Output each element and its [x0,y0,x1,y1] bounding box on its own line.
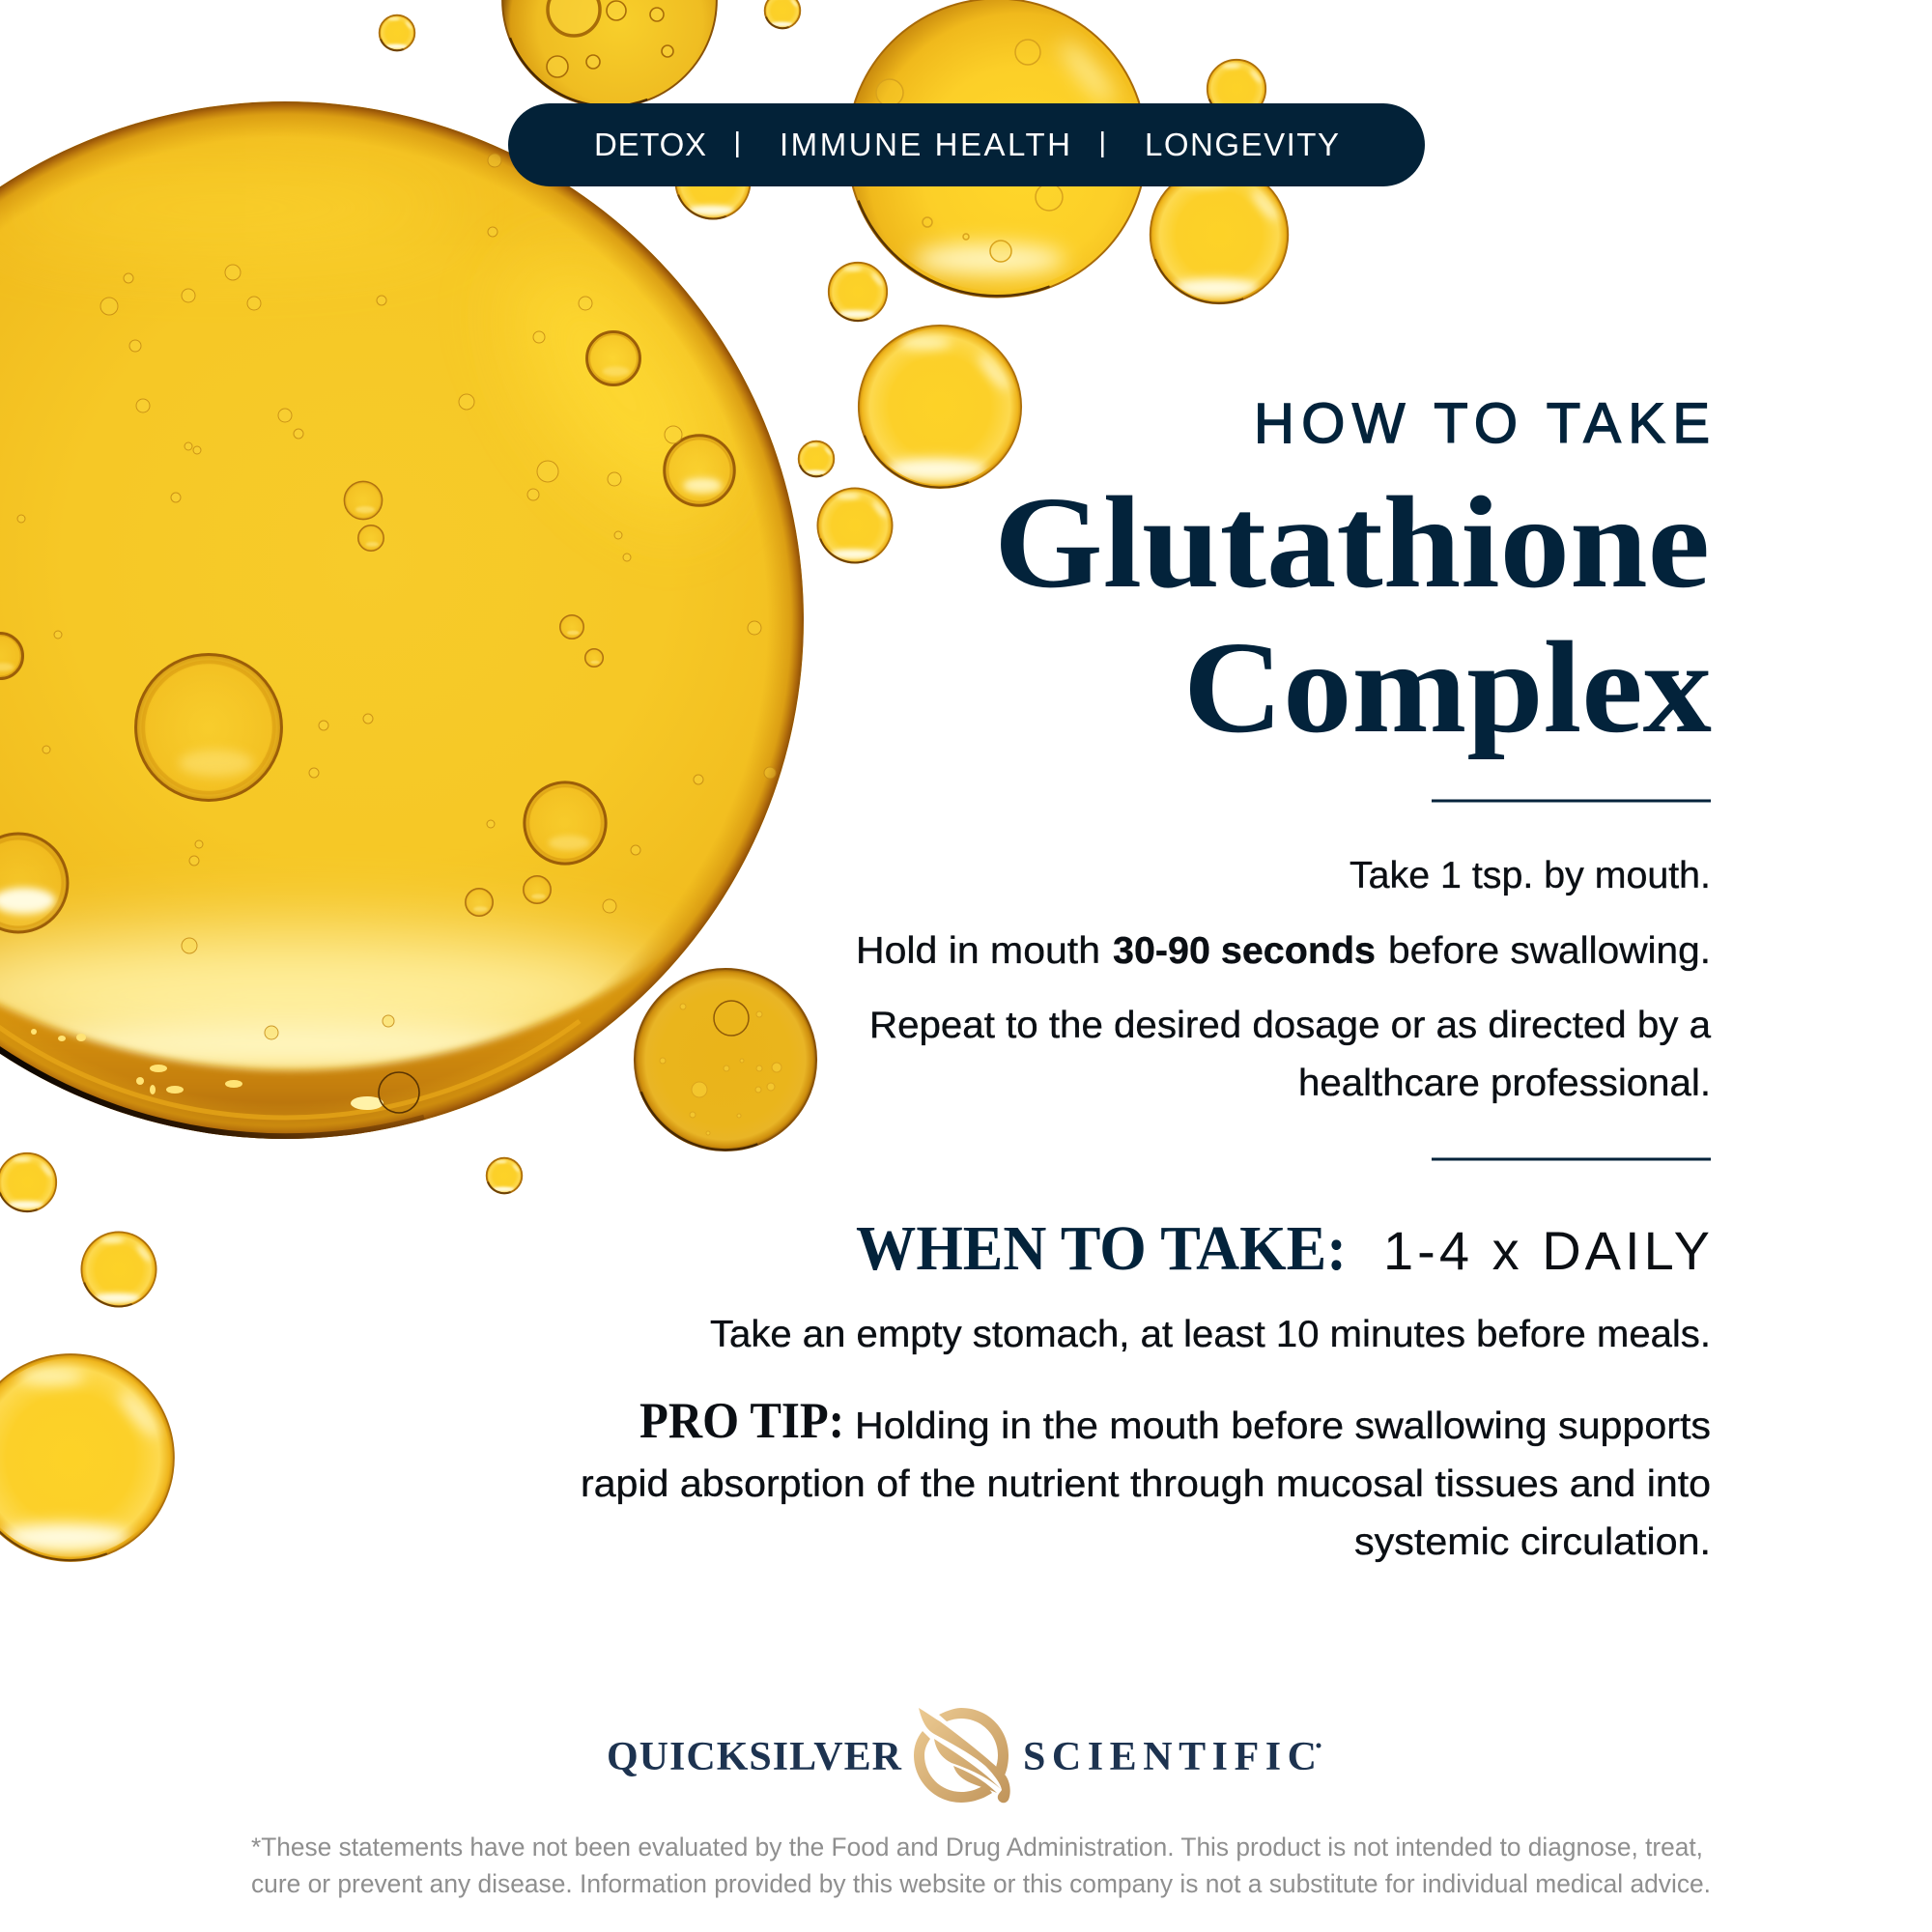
small droplets cluster [0,0,1288,1561]
dosage instructions: 30-90 seconds [1113,930,1376,972]
banner label: immune health: IMMUNE HEALTH [780,127,1070,162]
title line 2: Complex [1183,615,1712,760]
top right large bubble [848,0,1146,297]
brand logo [607,1708,1321,1803]
top pill banner [508,103,1425,186]
inner bubbles [0,154,776,1113]
pro tip: Holding in the mouth before swallowing supports [855,1406,1711,1447]
banner label: longevity: LONGEVITY [1145,127,1339,162]
disclaimer: *These statements have not been evaluated by the Food and Drug Administration. This product is not intended to diagnose, treat, [251,1833,1703,1861]
lower amber bubble [635,969,816,1151]
brand logo: SCIENTIFIC [1023,1735,1317,1779]
dosage instructions [856,855,1712,1104]
dosage instructions: Hold in mouth [856,930,1100,972]
pro tip: rapid absorption of the nutrient through mucosal tissues and into [581,1463,1711,1505]
dosage instructions: Repeat to the desired dosage or as directed by a [869,1005,1712,1046]
pro tip: systemic circulation. [1354,1521,1711,1563]
dosage instructions: Take 1 tsp. by mouth. [1350,855,1711,896]
logo mark: gold ring and feather [914,1708,1010,1803]
when to take detail: Take an empty stomach, at least 10 minutes before meals. [710,1314,1711,1355]
pro tip: PRO TIP: [639,1393,844,1449]
brand logo: QUICKSILVER [607,1735,902,1779]
divider top [1432,800,1711,802]
banner separator [1101,131,1103,157]
banner label: detox: DETOX [594,127,706,162]
disclaimer [251,1833,1711,1898]
banner separator [736,131,738,157]
divider bottom [1432,1157,1711,1161]
big oil bubble [0,101,804,1143]
eyebrow heading: HOW TO TAKE [1254,392,1710,455]
when to take heading: WHEN TO TAKE: [856,1213,1347,1284]
pro tip [581,1393,1711,1563]
disclaimer: cure or prevent any disease. Information provided by this website or this company is not a substitute for individual medical advice. [251,1869,1711,1898]
dosage instructions: before swallowing. [1388,930,1711,972]
title line 1: Glutathione [994,470,1710,615]
when to take heading: 1-4 x DAILY [1383,1220,1710,1281]
dosage instructions: healthcare professional. [1298,1063,1711,1104]
top centre amber bubble [502,0,717,107]
when to take heading [856,1213,1710,1284]
